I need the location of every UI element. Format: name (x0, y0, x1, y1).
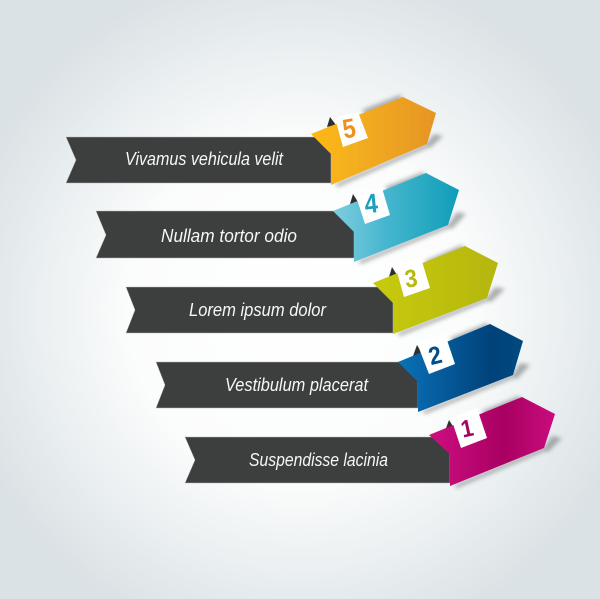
number tag 2: 2 (426, 341, 445, 371)
ribbon 2 (156, 362, 418, 408)
flag 5 (311, 97, 436, 185)
ribbon 3 (126, 287, 393, 333)
flag shadow 4 (358, 172, 466, 264)
number tag 2 (417, 334, 455, 374)
flag 2 (398, 324, 523, 412)
number tag 4 (355, 188, 390, 224)
ribbon text 4: Nullam tortor odio (161, 226, 297, 246)
flag 3 (373, 246, 498, 334)
pointer 1 (445, 420, 454, 431)
number tag 3 (395, 258, 430, 297)
flag 4 (333, 173, 459, 262)
pointer 2 (413, 345, 422, 356)
ribbon 5 (66, 137, 331, 183)
pointer 5 (327, 117, 336, 127)
number tag 1: 1 (458, 414, 476, 443)
pointer 3 (389, 267, 397, 277)
ribbon text 3: Lorem ipsum dolor (189, 300, 327, 320)
number tag 4: 4 (363, 189, 379, 220)
number tag 5 (335, 112, 368, 147)
ribbon 4 (96, 211, 354, 258)
item 3 (126, 245, 505, 336)
ribbon 1 (185, 437, 450, 483)
item 4 (96, 172, 466, 264)
number tag 1 (451, 408, 487, 448)
flag shadow 2 (422, 323, 530, 414)
pointer 4 (350, 194, 358, 204)
item 2 (156, 323, 530, 414)
ribbon text 1: Suspendisse lacinia (249, 450, 388, 470)
flag shadow 1 (454, 396, 562, 488)
item 5 (66, 95, 443, 187)
ribbon text 5: Vivamus vehicula velit (125, 149, 284, 169)
flag shadow 5 (335, 95, 443, 187)
number tag 5: 5 (340, 113, 358, 145)
flag shadow 3 (397, 245, 505, 336)
item 1 (185, 396, 562, 488)
flag 1 (429, 397, 555, 486)
number tag 3: 3 (403, 264, 419, 294)
ribbon text 2: Vestibulum placerat (225, 375, 369, 395)
